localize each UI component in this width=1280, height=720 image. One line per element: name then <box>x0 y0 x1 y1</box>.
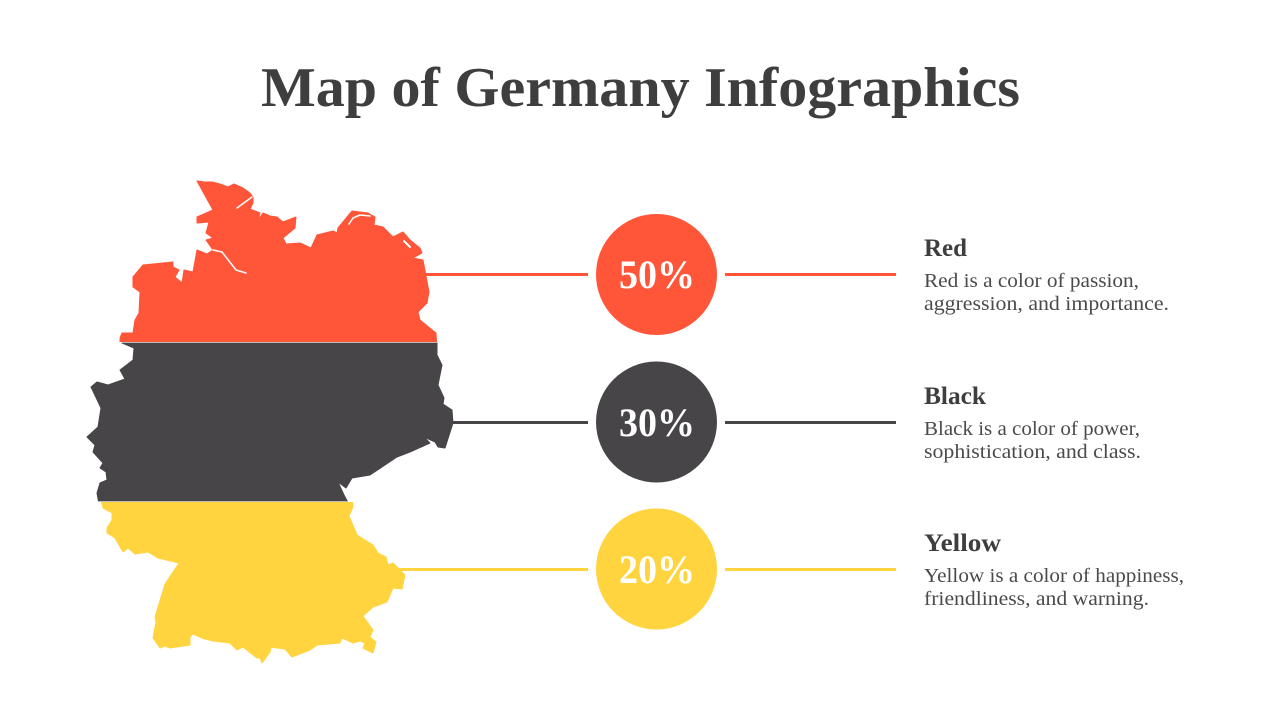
description: Red: aggression, and importance. <box>924 293 1169 315</box>
heading: Black: Black <box>924 383 986 410</box>
value: 20%: 20% <box>619 547 695 592</box>
heading: Red: Red <box>924 235 967 262</box>
title: Map of Germany Infographics <box>261 57 1020 119</box>
connector line right <box>725 273 896 276</box>
description: Red: Red is a color of passion, <box>924 270 1139 292</box>
value: 30%: 30% <box>619 400 695 445</box>
description: Black: sophistication, and class. <box>924 441 1141 463</box>
heading: Yellow: Yellow <box>924 530 1001 557</box>
connector line right <box>725 421 896 424</box>
map region: black centre <box>87 335 453 510</box>
map region: yellow south <box>100 495 405 663</box>
value: 50%: 50% <box>619 252 695 297</box>
row: red <box>424 214 1169 335</box>
circle: 30% <box>596 362 717 482</box>
connector line left <box>450 421 588 424</box>
map of Germany <box>87 181 453 663</box>
circle: 20% <box>596 508 717 630</box>
connector line left <box>398 568 588 571</box>
circle: 50% <box>596 214 717 335</box>
connector line left <box>424 273 588 276</box>
map detail: river inlets <box>213 197 410 273</box>
row: yellow <box>398 508 1184 630</box>
connector line right <box>725 568 896 571</box>
map region: red north <box>120 181 437 350</box>
description: Black: Black is a color of power, <box>924 418 1140 440</box>
description: Yellow: Yellow is a color of happiness, <box>924 565 1184 587</box>
row: black <box>450 362 1141 482</box>
description: Yellow: friendliness, and warning. <box>924 588 1149 610</box>
